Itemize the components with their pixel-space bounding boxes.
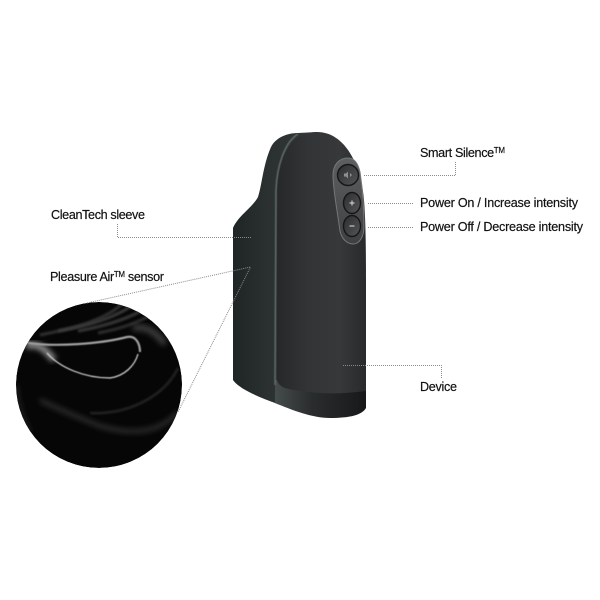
button capsule [333,158,364,244]
button: Smart Silence [338,164,358,186]
leader line: CleanTech sleeve [118,224,251,238]
leader line: Device [343,366,442,378]
leader line: Power On [368,202,413,204]
button: minus [344,216,360,236]
label: Pleasure Air sensor: TM [114,270,125,279]
device body [277,132,366,393]
leader lines: Pleasure Air sensor [87,267,250,412]
device illustration [233,132,366,418]
label: Power On: Power On / Increase intensity [420,196,579,210]
sleeve [233,132,320,412]
leader line: Smart Silence [363,162,456,176]
leader line: Power Off [368,226,413,228]
bottom band [275,380,366,418]
label: Device: Device [420,380,457,394]
label: CleanTech sleeve: CleanTech sleeve [51,208,145,222]
label: Pleasure Air sensor: Pleasure Air [50,270,114,284]
sleeve edge highlight [275,134,298,385]
label: Smart Silence: TM [494,146,505,155]
zoomed sensor detail circle [16,302,182,468]
label: Pleasure Air sensor: sensor [125,270,164,284]
label: Smart Silence: Smart Silence [420,146,494,160]
label: Power Off: Power Off / Decrease intensity [420,220,584,234]
button: plus [344,192,360,214]
